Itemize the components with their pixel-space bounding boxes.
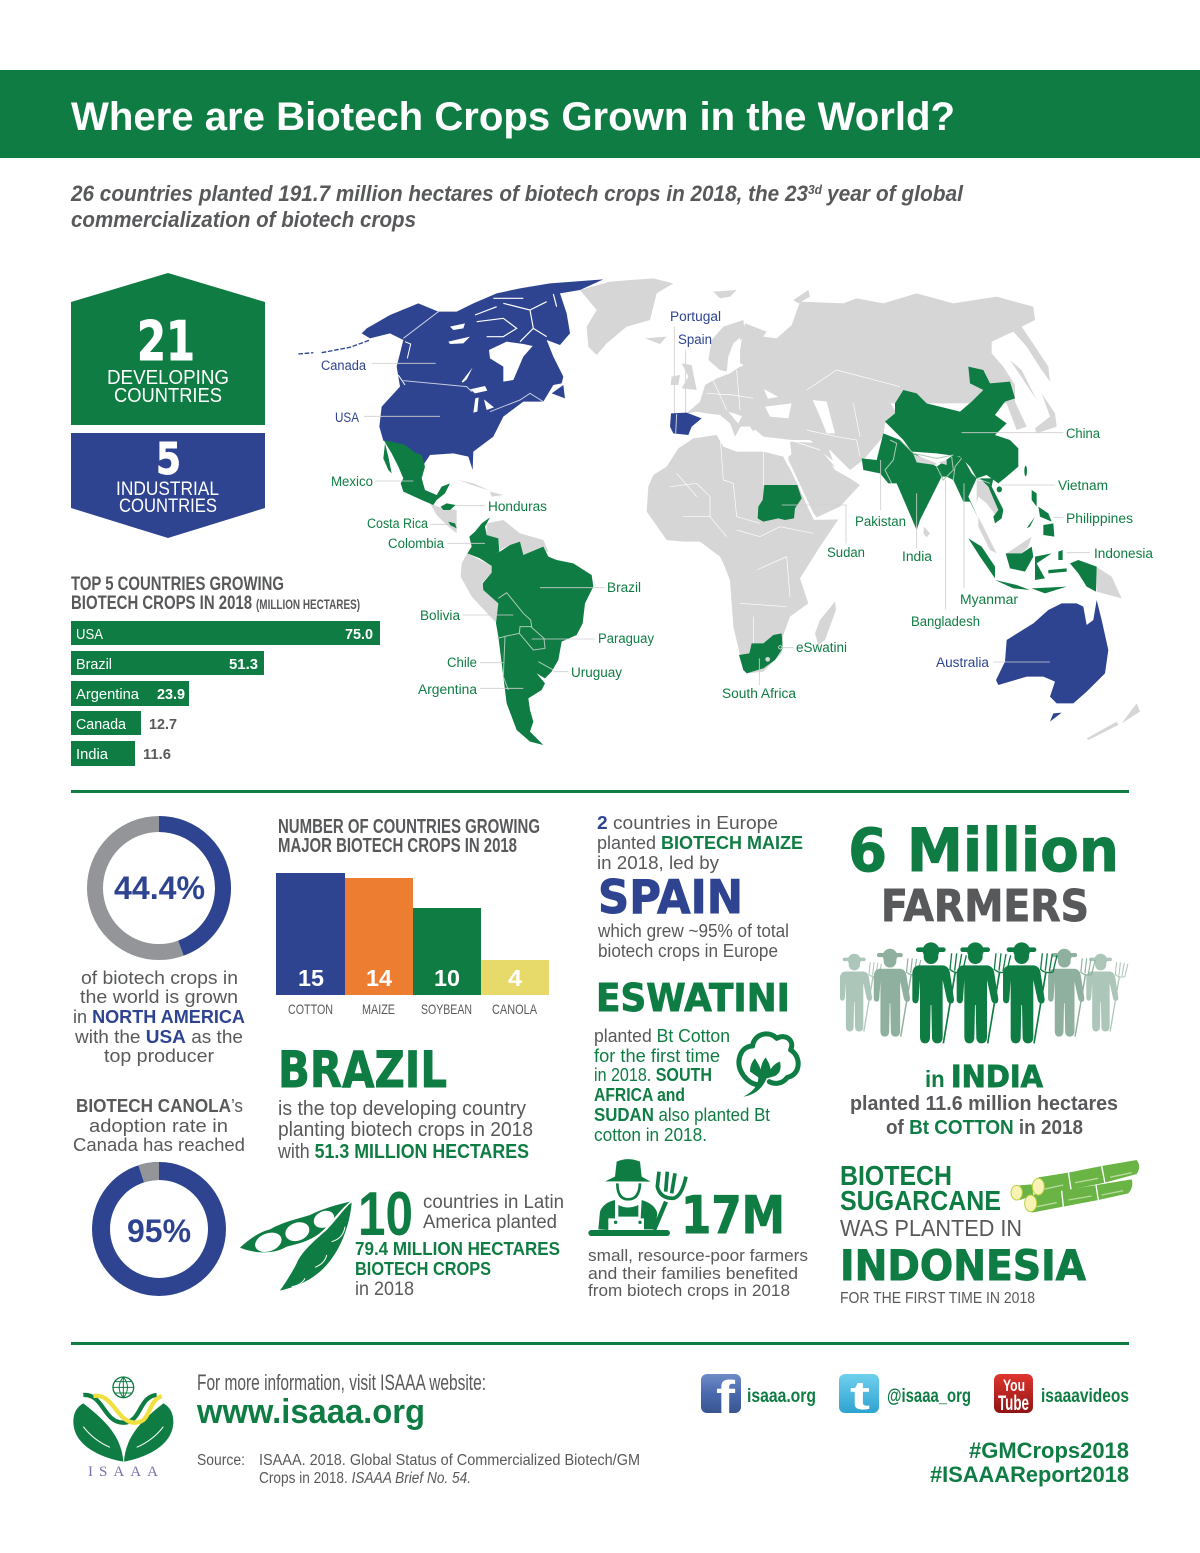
Brazil block: BRAZIL bbox=[278, 1041, 447, 1099]
bar chart: crops by countries: 15 bbox=[298, 965, 324, 991]
bar chart: crops by countries: 14 bbox=[366, 965, 392, 991]
Latin America stat: 10 bbox=[358, 1180, 413, 1249]
Latin America stat: 79.4 MILLION HECTARES bbox=[355, 1238, 560, 1259]
footer: website: For more information, visit ISAAA website: bbox=[197, 1370, 486, 1395]
map labels: Sudan bbox=[827, 545, 865, 560]
map labels: Philippines bbox=[1066, 511, 1133, 526]
heading: number of countries chart bbox=[278, 816, 540, 857]
icon: cotton boll bbox=[739, 1034, 798, 1097]
donut: 95% bbox=[86, 1156, 232, 1302]
bar chart: crops by countries bbox=[276, 873, 549, 1017]
Eswatini block: ESWATINI bbox=[596, 976, 790, 1020]
badge: 21 developing countries bbox=[71, 273, 265, 425]
icon: facebook bbox=[701, 1371, 741, 1423]
Latin America stat: America planted bbox=[423, 1212, 557, 1233]
icon: youtube: You bbox=[1003, 1376, 1025, 1395]
bar chart: crops by countries: CANOLA bbox=[492, 1001, 538, 1017]
bar chart: top 5 countries: 75.0 bbox=[345, 627, 373, 643]
Spain block bbox=[597, 812, 803, 961]
subtitle: commercialization of biotech crops bbox=[71, 207, 416, 232]
bar chart: top 5 countries: 11.6 bbox=[143, 747, 171, 763]
subtitle: 3d bbox=[808, 182, 823, 197]
map labels: Uruguay bbox=[571, 665, 622, 680]
17M farmers stat: 17M bbox=[681, 1186, 785, 1246]
divider top bbox=[71, 790, 1129, 793]
divider bottom bbox=[71, 1342, 1129, 1345]
India text: in INDIA bbox=[925, 1060, 1044, 1095]
map labels: Paraguay bbox=[598, 631, 654, 646]
bar chart: top 5 countries: Canada bbox=[76, 716, 127, 733]
twitter handle: @isaaa_org bbox=[887, 1386, 971, 1407]
bar chart: crops by countries: SOYBEAN bbox=[421, 1001, 472, 1017]
17M farmers stat: small, resource-poor farmers bbox=[588, 1246, 808, 1265]
India text: of Bt COTTON in 2018 bbox=[886, 1117, 1083, 1139]
bar chart: top 5 countries: India bbox=[76, 746, 109, 763]
map labels: Indonesia bbox=[1094, 546, 1153, 561]
India text: planted 11.6 million hectares bbox=[850, 1093, 1118, 1115]
Indonesia sugarcane block: WAS PLANTED IN bbox=[840, 1215, 1022, 1241]
icon: facebook: f bbox=[716, 1371, 736, 1423]
bar chart: crops by countries: MAIZE bbox=[362, 1001, 395, 1017]
Indonesia sugarcane block: SUGARCANE bbox=[840, 1185, 1001, 1216]
bar chart: crops by countries: 10 bbox=[434, 965, 460, 991]
badge: 5 industrial countries: COUNTRIES bbox=[119, 496, 217, 517]
footer: website: www.isaaa.org bbox=[196, 1393, 425, 1431]
6 million farmers heading: FARMERS bbox=[881, 881, 1089, 932]
text: North America share: of biotech crops in bbox=[81, 967, 238, 988]
bar chart: top 5 countries bbox=[71, 621, 380, 766]
Indonesia sugarcane block: INDONESIA bbox=[840, 1241, 1086, 1290]
map labels: Bangladesh bbox=[911, 614, 980, 629]
bar chart: top 5 countries: Argentina bbox=[76, 686, 140, 703]
Eswatini block: cotton in 2018. bbox=[594, 1124, 707, 1145]
6 million farmers heading bbox=[848, 816, 1119, 932]
map labels: Argentina bbox=[418, 682, 477, 697]
text: North America share: in NORTH AMERICA bbox=[73, 1006, 245, 1027]
heading: number of countries chart: MAJOR BIOTECH CROPS IN 2018 bbox=[278, 835, 517, 857]
heading: top 5 countries: TOP 5 COUNTRIES GROWING bbox=[71, 574, 284, 595]
Spain block: planted BIOTECH MAIZE bbox=[597, 832, 803, 853]
bar chart: crops by countries: COTTON bbox=[288, 1001, 333, 1017]
map: Americas bbox=[298, 278, 686, 745]
facebook handle: isaaa.org bbox=[747, 1386, 816, 1407]
hashtags bbox=[930, 1438, 1129, 1487]
icon: sugarcane bbox=[1011, 1160, 1139, 1213]
map labels: Myanmar bbox=[960, 592, 1019, 607]
title banner bbox=[0, 70, 1200, 158]
hashtags: #ISAAAReport2018 bbox=[930, 1462, 1129, 1487]
Spain block: SPAIN bbox=[598, 870, 743, 924]
map labels: Spain bbox=[678, 332, 712, 347]
bar chart: top 5 countries: 12.7 bbox=[149, 717, 177, 733]
hashtags: #GMCrops2018 bbox=[969, 1438, 1129, 1463]
Eswatini block: in 2018. SOUTH bbox=[594, 1064, 712, 1085]
map labels: Colombia bbox=[388, 536, 444, 551]
heading: top 5 countries: (MILLION HECTARES) bbox=[256, 596, 360, 612]
subtitle: year of global bbox=[826, 181, 964, 206]
Spain block: in 2018, led by bbox=[597, 852, 720, 873]
text: North America share: the world is grown bbox=[80, 986, 238, 1007]
Brazil block: planting biotech crops in 2018 bbox=[278, 1119, 533, 1141]
India text bbox=[850, 1060, 1118, 1139]
icon: soybean pods bbox=[240, 1202, 352, 1291]
heading: top 5 countries: BIOTECH CROPS IN 2018 bbox=[71, 593, 252, 614]
map labels bbox=[321, 309, 1153, 701]
Indonesia sugarcane block bbox=[840, 1160, 1086, 1307]
footer: source: ISAAA. 2018. Global Status of Commercialized Biotech/GM bbox=[259, 1452, 640, 1469]
map labels: China bbox=[1066, 426, 1100, 441]
badge: 5 industrial countries bbox=[71, 433, 265, 538]
Indonesia sugarcane block: BIOTECH bbox=[840, 1160, 952, 1191]
map labels: eSwatini bbox=[796, 640, 847, 655]
map labels: India bbox=[902, 549, 932, 564]
icon: youtube: Tube bbox=[998, 1392, 1029, 1415]
logo: ISAAA bbox=[73, 1377, 173, 1480]
map labels: Australia bbox=[936, 655, 989, 670]
world map bbox=[298, 278, 1153, 745]
icon: twitter bbox=[839, 1374, 879, 1418]
bar chart: top 5 countries: Brazil bbox=[76, 656, 112, 673]
donut: 44.4%: 44.4% bbox=[114, 870, 205, 906]
badge: 21 developing countries: 21 bbox=[137, 310, 195, 373]
Latin America stat: in 2018 bbox=[355, 1279, 414, 1300]
map labels: Honduras bbox=[488, 499, 547, 514]
subtitle bbox=[70, 181, 964, 232]
Spain block: which grew ~95% of total bbox=[597, 921, 789, 941]
Eswatini block bbox=[594, 976, 790, 1145]
Brazil block: is the top developing country bbox=[278, 1098, 526, 1120]
map labels: South Africa bbox=[722, 686, 796, 701]
Indonesia sugarcane block: FOR THE FIRST TIME IN 2018 bbox=[840, 1290, 1035, 1307]
icon: twitter: t bbox=[850, 1374, 870, 1418]
subtitle: 26 countries planted 191.7 million hectares of biotech crops in 2018, the 23 bbox=[70, 181, 808, 206]
map labels: Bolivia bbox=[420, 608, 460, 623]
Spain block: 2 countries in Europe bbox=[597, 812, 778, 833]
Eswatini block: AFRICA and bbox=[594, 1084, 685, 1105]
map labels: Canada bbox=[321, 358, 366, 373]
badge: 5 industrial countries: INDUSTRIAL bbox=[116, 479, 219, 500]
donut: 95%: 95% bbox=[127, 1213, 191, 1249]
text: canola adoption: Canada has reached bbox=[73, 1134, 245, 1155]
heading: top 5 countries bbox=[71, 574, 360, 614]
Latin America stat: countries in Latin bbox=[423, 1192, 564, 1213]
text: North America share: with the USA as the bbox=[74, 1026, 243, 1047]
map labels: Vietnam bbox=[1058, 478, 1108, 493]
text: North America share bbox=[73, 967, 245, 1066]
Eswatini block: planted Bt Cotton bbox=[594, 1025, 730, 1046]
map labels: Mexico bbox=[331, 474, 373, 489]
map labels: USA bbox=[335, 410, 359, 425]
17M farmers stat: and their families benefited bbox=[588, 1264, 798, 1283]
footer: source bbox=[197, 1452, 640, 1487]
icon: farmer with fork bbox=[588, 1159, 686, 1236]
Latin America stat bbox=[355, 1180, 564, 1300]
Brazil block bbox=[277, 1041, 533, 1163]
17M farmers stat: from biotech crops in 2018 bbox=[588, 1281, 790, 1300]
youtube handle: isaaavideos bbox=[1041, 1386, 1129, 1407]
icon: youtube bbox=[994, 1374, 1033, 1415]
icon: row of farmers bbox=[840, 942, 1128, 1043]
footer: website bbox=[196, 1370, 486, 1431]
badge: 21 developing countries: COUNTRIES bbox=[114, 385, 222, 407]
text: canola adoption bbox=[73, 1095, 245, 1155]
footer: source: Source: bbox=[197, 1452, 245, 1469]
badge: 5 industrial countries: 5 bbox=[156, 434, 181, 485]
map labels: Portugal bbox=[670, 309, 721, 324]
bar chart: top 5 countries: 23.9 bbox=[157, 687, 185, 703]
Spain block: biotech crops in Europe bbox=[598, 941, 778, 961]
map labels: Costa Rica bbox=[367, 516, 428, 531]
bar chart: top 5 countries: 51.3 bbox=[229, 657, 258, 673]
17M farmers stat bbox=[588, 1186, 808, 1300]
donut: 44.4% bbox=[95, 824, 223, 952]
text: canola adoption: adoption rate in bbox=[89, 1115, 228, 1136]
map labels: Pakistan bbox=[855, 514, 906, 529]
map labels: Chile bbox=[447, 655, 477, 670]
map: Europe, Africa, Asia, Oceania bbox=[647, 290, 1140, 740]
bar chart: top 5 countries: USA bbox=[76, 626, 103, 643]
footer: source: Crops in 2018. ISAAA Brief No. 54. bbox=[259, 1470, 471, 1487]
Eswatini block: SUDAN also planted Bt bbox=[594, 1104, 770, 1125]
text: canola adoption: BIOTECH CANOLA’s bbox=[76, 1095, 243, 1116]
badge: 21 developing countries: DEVELOPING bbox=[107, 367, 229, 389]
text: North America share: top producer bbox=[104, 1045, 214, 1066]
Eswatini block: for the first time bbox=[594, 1045, 720, 1066]
bar chart: crops by countries: 4 bbox=[508, 965, 522, 991]
logo: ISAAA: ISAAA bbox=[88, 1464, 158, 1480]
Latin America stat: BIOTECH CROPS bbox=[355, 1258, 491, 1279]
title: Where are Biotech Crops Grown in the World? bbox=[71, 95, 955, 139]
6 million farmers heading: 6 Million bbox=[848, 816, 1119, 886]
map labels: Brazil bbox=[607, 580, 641, 595]
Brazil block: with 51.3 MILLION HECTARES bbox=[277, 1141, 529, 1163]
heading: number of countries chart: NUMBER OF COUNTRIES GROWING bbox=[278, 816, 540, 838]
